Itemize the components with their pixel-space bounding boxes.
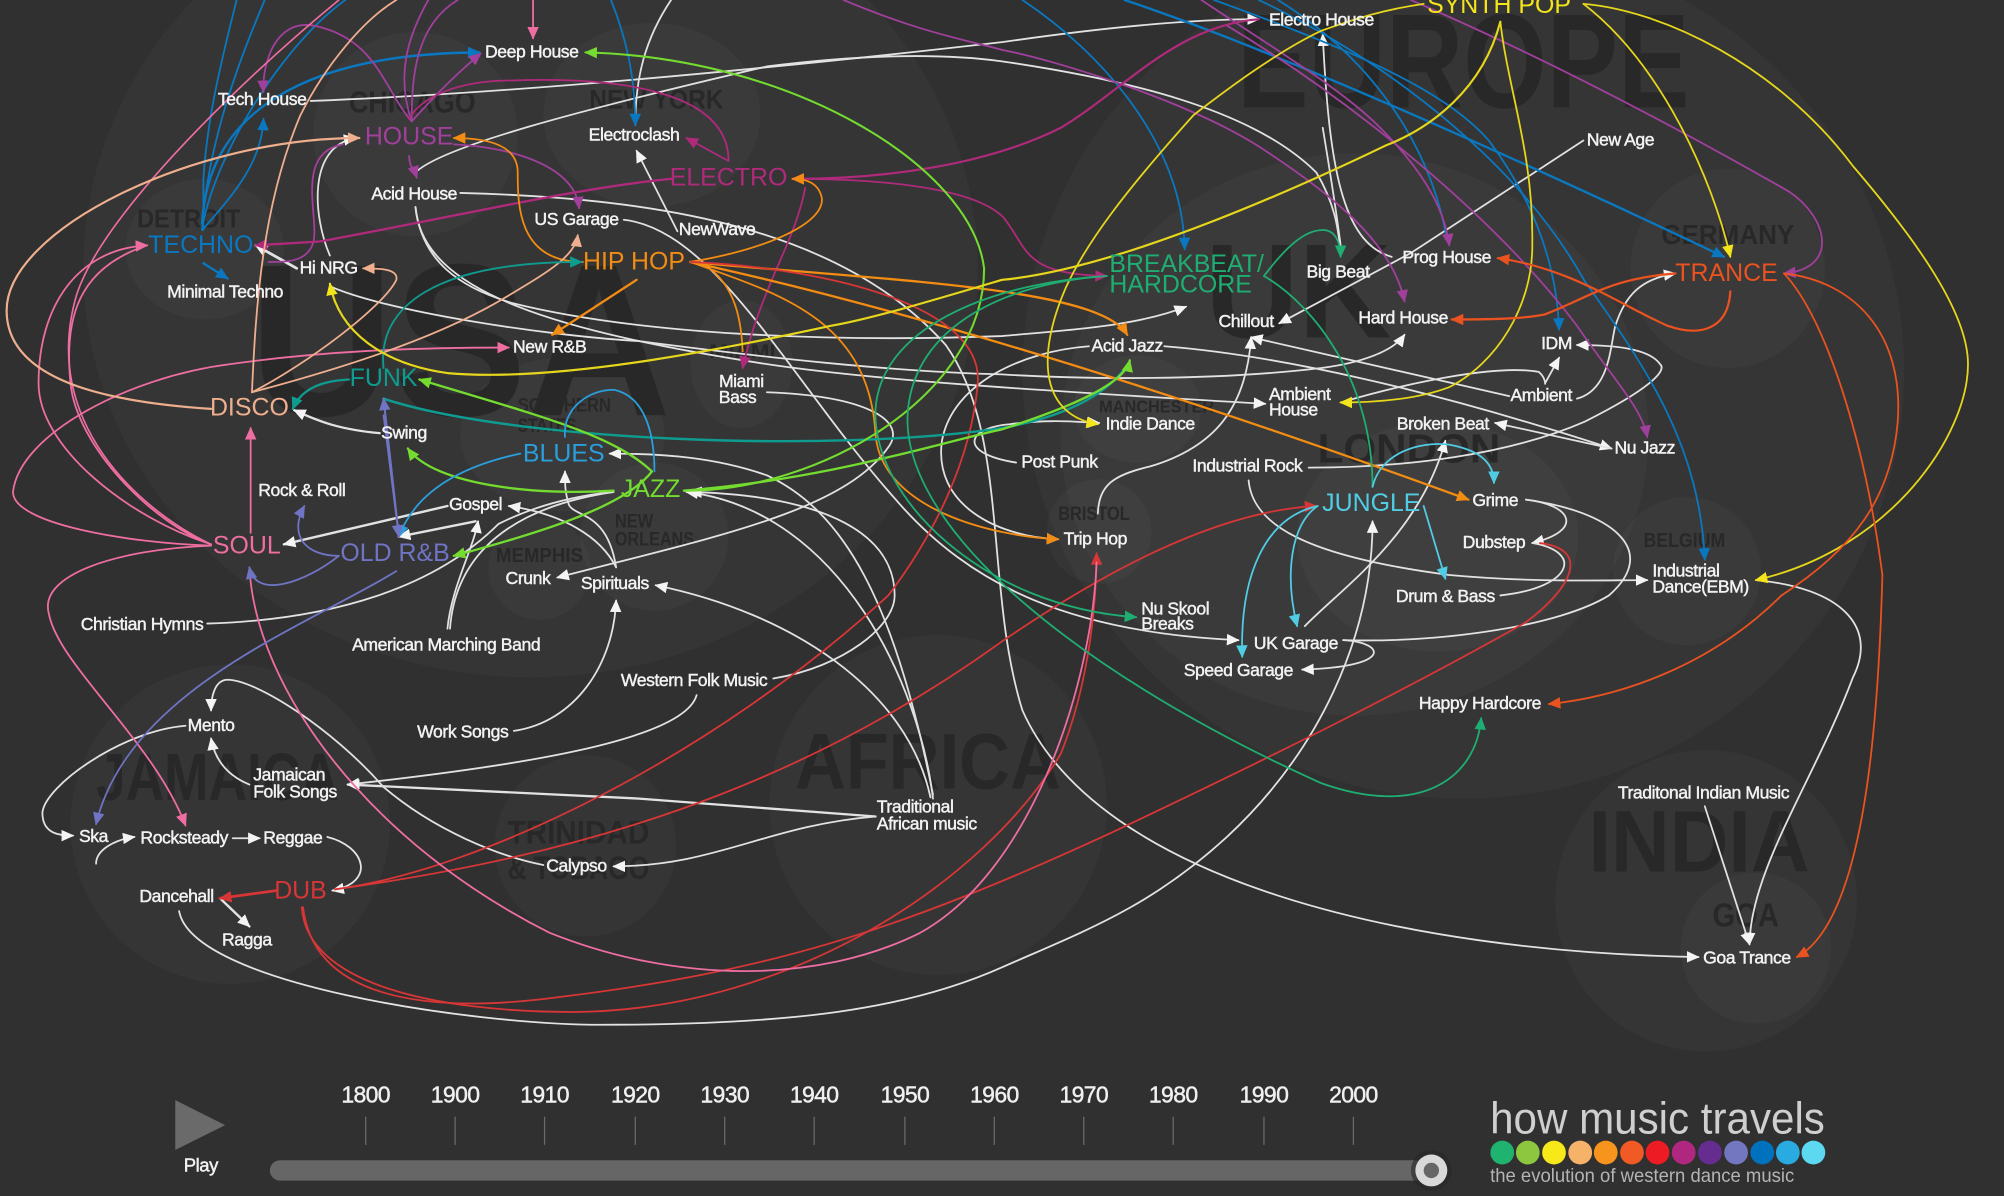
region names: & TOBAGO <box>507 850 649 886</box>
label: DISCO: DISCO <box>210 393 289 421</box>
label: Traditional Indian Music: Traditonal Indian Music <box>1618 783 1790 803</box>
label: Ambient: Ambient <box>1510 385 1573 405</box>
label: Spirituals: Spirituals <box>581 573 649 593</box>
timeline years: 1980 <box>1149 1082 1198 1108</box>
label: Indie Dance: Indie Dance <box>1106 413 1195 433</box>
label: Prog House: Prog House <box>1402 247 1492 267</box>
label: DUB: DUB <box>274 876 327 904</box>
timeline years: 1930 <box>700 1082 749 1108</box>
region names <box>96 0 1810 934</box>
genre labels <box>79 0 1791 967</box>
label: BLUES: BLUES <box>523 439 605 467</box>
label: UK Garage: UK Garage <box>1254 633 1339 653</box>
label: Electroclash: Electroclash <box>589 125 679 145</box>
label: Deep House: Deep House <box>485 41 579 61</box>
region names: NEW YORK <box>589 85 724 115</box>
label: Crunk: Crunk <box>506 568 551 588</box>
label: Speed Garage: Speed Garage <box>1184 660 1294 680</box>
timeline years: 1960 <box>970 1082 1019 1108</box>
label: Happy Hardcore: Happy Hardcore <box>1419 693 1542 713</box>
region names: MIAMI <box>709 342 776 363</box>
connections: breakbeat green <box>875 230 1481 796</box>
label: Chillout: Chillout <box>1218 311 1274 331</box>
connections: jazz green <box>408 52 1130 556</box>
label: Mento: Mento <box>188 715 235 735</box>
timeline years: 1910 <box>520 1082 569 1108</box>
region names: JAMAICA <box>96 741 339 815</box>
region names: INDIA <box>1588 793 1810 890</box>
timeline years: 1970 <box>1059 1082 1108 1108</box>
region names: LONDON <box>1318 426 1500 472</box>
timeline years: 2000 <box>1329 1082 1378 1108</box>
region names: TRINIDAD <box>507 814 649 850</box>
label: Hard House: Hard House <box>1358 307 1449 327</box>
label: IDM: IDM <box>1541 333 1572 353</box>
label: Drum & Bass: Drum & Bass <box>1396 586 1495 606</box>
connections: funk teal <box>293 262 1130 441</box>
label: NewWave: NewWave <box>679 219 756 239</box>
slider track <box>270 1160 1426 1181</box>
label: SOUL: SOUL <box>213 531 281 559</box>
connections: blues blue <box>399 390 654 537</box>
label: New R&B: New R&B <box>513 337 586 357</box>
label: Industrial Dance(EBM): Industrial <box>1652 560 1719 580</box>
logo tagline: the evolution of western dance music <box>1490 1166 1795 1187</box>
label: Reggae: Reggae <box>263 827 323 847</box>
label: TECHNO: TECHNO <box>148 231 253 259</box>
label: Acid Jazz: Acid Jazz <box>1092 335 1163 355</box>
label: Tech House: Tech House <box>218 89 307 109</box>
label: Ragga: Ragga <box>222 930 272 950</box>
label: Industrial Rock: Industrial Rock <box>1192 456 1303 476</box>
connections: electro magenta <box>256 19 1259 368</box>
label: Jamaican Folk Songs: Jamaican <box>253 765 325 785</box>
connections: disco peach <box>7 0 578 409</box>
label: HIP HOP: HIP HOP <box>583 248 685 276</box>
logo title: how music travels <box>1490 1094 1825 1143</box>
logo <box>1490 1094 1825 1187</box>
connections: dub red <box>220 262 1570 1012</box>
label: Hi NRG: Hi NRG <box>300 257 358 277</box>
region names: ORLEANS <box>615 530 694 551</box>
timeline years: 1990 <box>1240 1082 1288 1108</box>
label: New Age: New Age <box>1587 130 1655 150</box>
label: American Marching Band: American Marching Band <box>352 634 540 654</box>
label: Goa Trance: Goa Trance <box>1703 947 1791 967</box>
label: Acid House: Acid House <box>371 183 458 203</box>
label: BREAKBEAT/HARDCORE: HARDCORE <box>1109 271 1252 299</box>
label: Dubstep: Dubstep <box>1463 532 1526 552</box>
region names: BRISTOL <box>1058 504 1130 525</box>
label: TRANCE: TRANCE <box>1675 259 1778 287</box>
label: Big Beat: Big Beat <box>1307 261 1370 281</box>
play label: Play <box>184 1155 219 1176</box>
label: Work Songs: Work Songs <box>417 721 509 741</box>
timeline <box>175 1082 1452 1191</box>
label: Rocksteady: Rocksteady <box>140 827 229 847</box>
connections: synth pop yellow <box>330 4 1968 580</box>
label: ELECTRO: ELECTRO <box>670 163 787 191</box>
region names: BELGIUM <box>1643 529 1725 552</box>
logo colour dots <box>1490 1141 1825 1164</box>
label: JUNGLE: JUNGLE <box>1322 489 1420 517</box>
label: JAZZ: JAZZ <box>621 475 680 503</box>
region names: GOA <box>1712 897 1779 934</box>
label: Miami Bass: Miami <box>719 371 764 391</box>
connections: soul pink <box>13 0 1097 971</box>
label: Rock & Roll: Rock & Roll <box>258 480 345 500</box>
region names: UK <box>1205 217 1392 366</box>
region names: GERMANY <box>1661 219 1794 250</box>
timeline years <box>341 1082 1378 1108</box>
connections: techno blue <box>202 0 1724 560</box>
label: Christian Hymns: Christian Hymns <box>81 614 204 634</box>
label: Electro House: Electro House <box>1269 10 1375 30</box>
region names: SOUTHERN <box>518 395 611 416</box>
slider knob <box>1411 1150 1452 1191</box>
connections: old r&b violet <box>96 399 399 824</box>
timeline ticks <box>366 1117 1353 1145</box>
connections: trance orange-red <box>1452 258 1898 957</box>
timeline years: 1950 <box>881 1082 929 1108</box>
label: Nu Skool Breaks: Breaks <box>1141 613 1194 633</box>
icon: play button <box>175 1100 225 1150</box>
region names: MANCHESTER <box>1099 397 1214 417</box>
label: Jamaican Folk Songs: Folk Songs <box>253 781 338 801</box>
timeline years: 1800 <box>341 1082 390 1108</box>
timeline years: 1940 <box>790 1082 838 1108</box>
label: Traditional African music: African music <box>877 813 977 833</box>
label: Trip Hop: Trip Hop <box>1064 528 1128 548</box>
label: Post Punk: Post Punk <box>1021 452 1098 472</box>
region names: NEW <box>615 512 654 533</box>
region names: USA <box>249 219 671 462</box>
connections: house purple <box>263 0 1822 437</box>
label: FUNK: FUNK <box>350 364 418 392</box>
timeline years: 1900 <box>431 1082 479 1108</box>
label: Grime: Grime <box>1472 490 1519 510</box>
label: Industrial Dance(EBM): Dance(EBM) <box>1652 576 1749 596</box>
label: Western Folk Music: Western Folk Music <box>621 670 768 690</box>
label: US Garage: US Garage <box>534 209 619 229</box>
label: Swing: Swing <box>381 422 427 442</box>
timeline years: 1920 <box>611 1082 660 1108</box>
region names: STATES <box>518 416 577 437</box>
label: Ska: Ska <box>79 826 109 846</box>
label: Ambient House: House <box>1269 399 1318 419</box>
region names: MEMPHIS <box>496 544 583 567</box>
label: Dancehall: Dancehall <box>139 886 214 906</box>
region names: DETROIT <box>137 205 241 233</box>
label: Ambient House: Ambient <box>1269 384 1330 404</box>
label: OLD R&B: OLD R&B <box>340 539 450 567</box>
label: HOUSE: HOUSE <box>365 122 453 150</box>
label: Minimal Techno: Minimal Techno <box>167 282 284 302</box>
connections: white <box>42 0 1861 1025</box>
label: Nu Skool Breaks: Nu Skool <box>1141 599 1209 619</box>
connections: jungle cyan <box>1242 444 1494 657</box>
region names: CHICAGO <box>349 85 476 119</box>
label: Traditional African music: Traditional <box>877 797 953 817</box>
label: BREAKBEAT/HARDCORE: BREAKBEAT/ <box>1109 250 1264 278</box>
label: Gospel: Gospel <box>449 494 502 514</box>
label: Miami Bass: Bass <box>719 387 757 407</box>
label: Nu Jazz: Nu Jazz <box>1614 438 1675 458</box>
label: Calypso: Calypso <box>546 855 607 875</box>
region names: AFRICA <box>795 716 1061 805</box>
label: Broken Beat: Broken Beat <box>1397 413 1489 433</box>
connections: hip hop orange <box>454 138 1468 539</box>
